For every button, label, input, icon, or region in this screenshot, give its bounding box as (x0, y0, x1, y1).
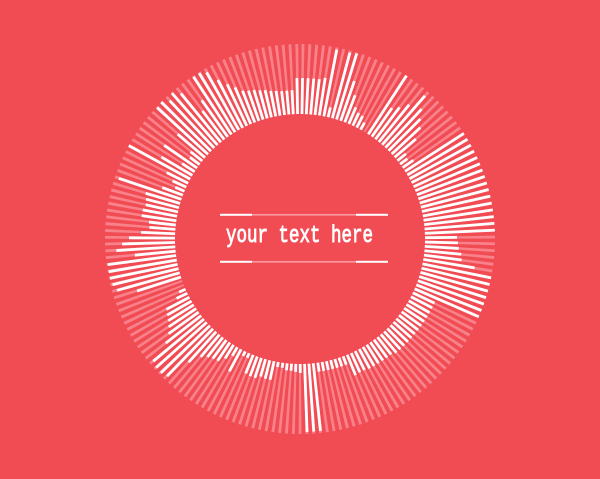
pale background ring of bars (139, 78, 461, 400)
bottom rule (220, 261, 388, 263)
radial chart (108, 50, 495, 432)
title: your text here (226, 223, 373, 250)
white value bars (108, 50, 495, 432)
top rule (220, 214, 388, 216)
